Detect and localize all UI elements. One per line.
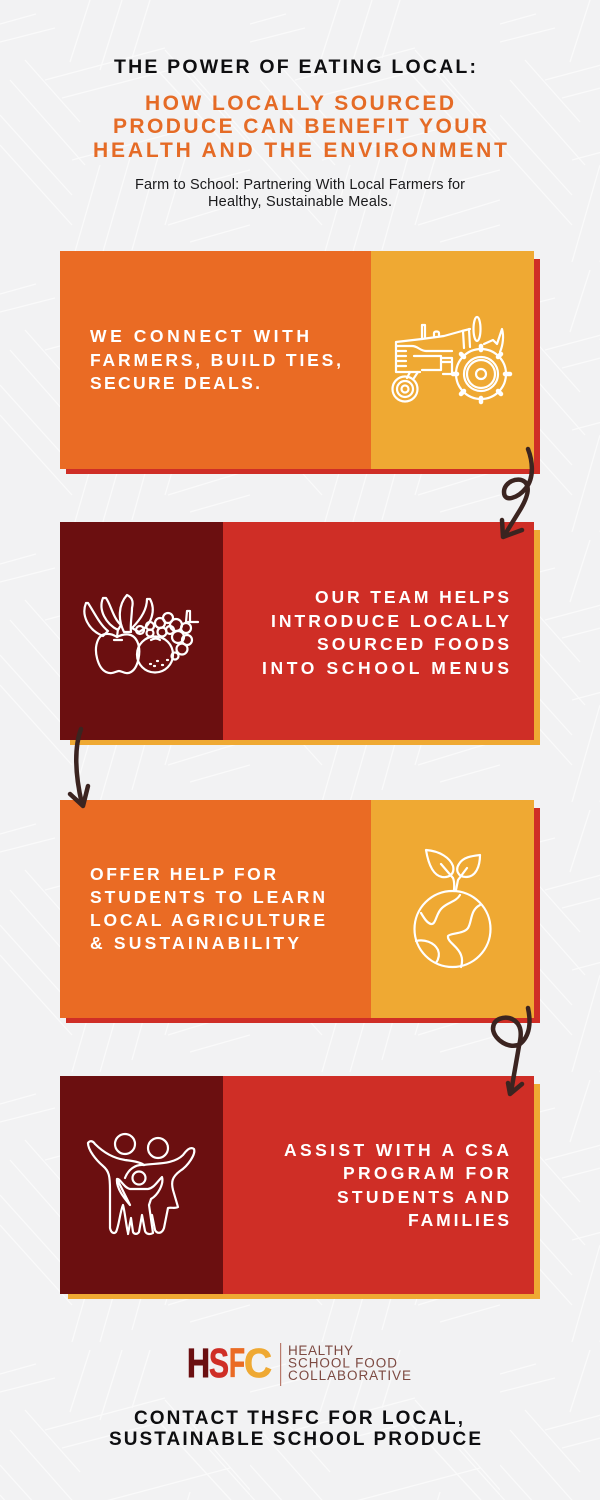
step 1 text (90, 326, 341, 393)
step 3 text (90, 864, 325, 953)
arrow: step 2 to step 3 (70, 729, 88, 806)
step 4 text: FAMILIES (408, 1210, 509, 1230)
intro text (135, 177, 465, 210)
arrow: step 3 to step 4 (493, 1008, 529, 1094)
icon: globe with sprout (414, 850, 490, 967)
step 3 text: LOCAL AGRICULTURE (90, 910, 325, 930)
footer call to action: SUSTAINABLE SCHOOL PRODUCE (109, 1429, 481, 1450)
icon: family (88, 1134, 194, 1234)
logo wordmark (288, 1343, 411, 1383)
intro text: Healthy, Sustainable Meals. (208, 194, 392, 210)
step 1 text: FARMERS, BUILD TIES, (90, 350, 341, 370)
step 4 text: PROGRAM FOR (343, 1163, 509, 1183)
step 4 text (284, 1140, 509, 1230)
step 3 text: & SUSTAINABILITY (90, 933, 299, 953)
title (93, 56, 507, 210)
subheading in orange: HOW LOCALLY SOURCED (145, 92, 454, 115)
arrow: step 1 to step 2 (502, 449, 532, 537)
subheading in orange (93, 92, 507, 162)
step 2 text: INTO SCHOOL MENUS (262, 658, 509, 678)
step 4 text: STUDENTS AND (337, 1187, 509, 1207)
logo: HSFC Healthy School Food Collaborative: S (209, 1340, 229, 1386)
step 4 text: ASSIST WITH A CSA (284, 1140, 509, 1160)
step 2 text: OUR TEAM HELPS (315, 587, 509, 607)
panel: step 2 locally sourced menus (60, 522, 540, 745)
subheading in orange: PRODUCE CAN BENEFIT YOUR (113, 115, 487, 138)
logo wordmark: COLLABORATIVE (288, 1368, 411, 1383)
panel: step 3 learning (60, 800, 540, 1023)
logo mark letters: H (187, 1340, 210, 1386)
panel: step 1 connect with farmers (60, 251, 540, 474)
intro text: Farm to School: Partnering With Local Farmers for (135, 177, 465, 193)
footer call to action (109, 1408, 481, 1450)
heading: the power of eating local: THE POWER OF EATING LOCAL: (114, 56, 476, 78)
step 3 text: STUDENTS TO LEARN (90, 887, 325, 907)
step 2 text: INTRODUCE LOCALLY (271, 611, 509, 631)
icon: tractor (392, 317, 510, 402)
footer call to action: CONTACT THSFC FOR LOCAL, (134, 1408, 463, 1429)
step 3 text: OFFER HELP FOR (90, 864, 276, 884)
logo: HSFC Healthy School Food Collaborative (187, 1340, 411, 1386)
subheading in orange: HEALTH AND THE ENVIRONMENT (93, 139, 507, 162)
step 1 text: WE CONNECT WITH (90, 326, 309, 346)
step 2 text (262, 587, 509, 678)
logo wordmark: SCHOOL FOOD (288, 1356, 397, 1370)
step 1 text: SECURE DEALS. (90, 373, 260, 393)
step 2 text: SOURCED FOODS (317, 634, 509, 654)
logo wordmark: HEALTHY (288, 1343, 353, 1358)
icon: fruit (84, 595, 198, 673)
panel: step 4 CSA program (60, 1076, 540, 1299)
logo: HSFC Healthy School Food Collaborative: C (244, 1340, 272, 1386)
logo: HSFC Healthy School Food Collaborative: F (229, 1340, 245, 1386)
